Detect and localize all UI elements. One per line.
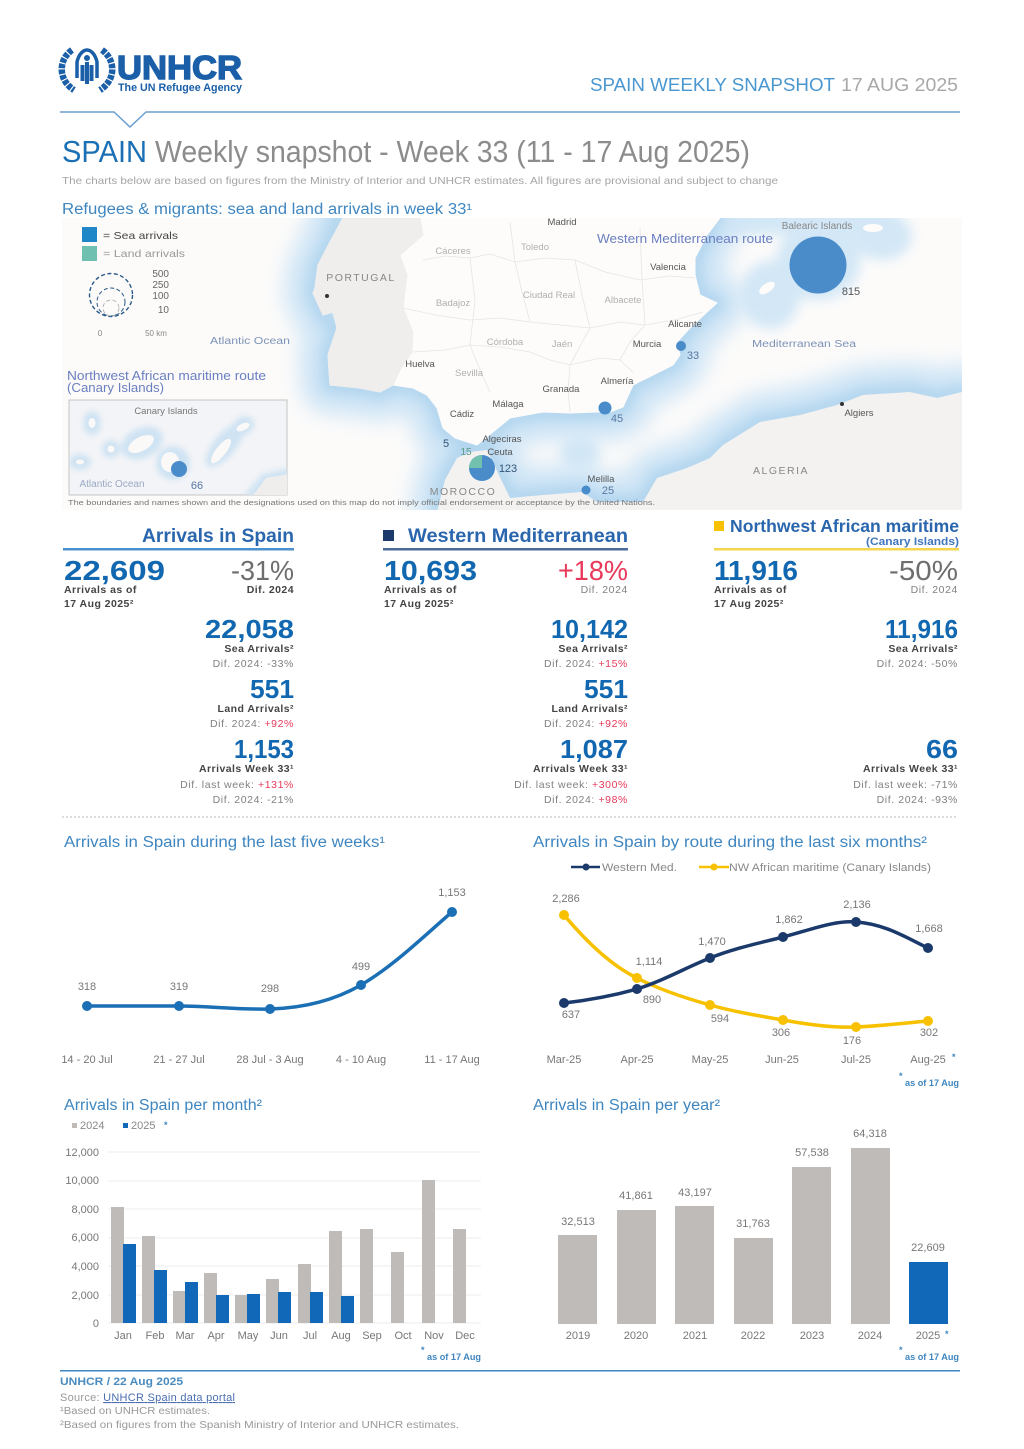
map labels: Cáceres [435, 246, 471, 257]
total arrivals: Arrivals as of [714, 584, 787, 596]
chart: arrivals per month [64, 1097, 481, 1362]
map heading: Refugees & migrants: sea and land arrivals in week 33¹ [62, 201, 472, 218]
map symbols: arrivals circles [325, 236, 860, 497]
x axis labels [61, 1054, 480, 1066]
x axis labels: 2025 [916, 1330, 940, 1342]
y axis and gridlines: 0 [93, 1318, 99, 1330]
land arrivals: 551 [250, 676, 294, 704]
week arrivals: Dif. 2024: -93% [877, 794, 958, 806]
map legend: 250 [152, 280, 169, 291]
header label [590, 74, 958, 95]
week arrivals [180, 736, 294, 806]
sea arrivals: Sea Arrivals² [888, 643, 958, 655]
header label: SPAIN WEEKLY SNAPSHOT [590, 74, 835, 95]
note: as of 17 Aug [427, 1352, 481, 1362]
sea arrivals: Dif. 2024: +15% [544, 658, 628, 670]
x axis labels: Sep [362, 1330, 382, 1342]
map labels: Almería [601, 376, 634, 387]
land arrivals: Dif. 2024: +92% [210, 718, 294, 730]
value labels: 302 [920, 1027, 938, 1039]
x axis labels: * [945, 1329, 949, 1339]
chart title: Arrivals in Spain during the last five weeks¹ [64, 834, 385, 851]
inset map: Canary Islands [69, 400, 290, 497]
series: NW African maritime [559, 910, 933, 1032]
week arrivals: 66 [926, 736, 958, 764]
map labels: Madrid [547, 217, 577, 228]
value labels: 319 [170, 981, 188, 993]
x axis labels: 11 - 17 Aug [424, 1054, 480, 1066]
x axis labels: 2021 [683, 1330, 707, 1342]
x axis labels: May [238, 1330, 259, 1342]
x axis labels: Dec [455, 1330, 475, 1342]
x axis labels: Jan [114, 1330, 132, 1342]
total arrivals [64, 555, 165, 610]
x axis labels: 4 - 10 Aug [336, 1054, 386, 1066]
panel: Northwest African maritime [714, 516, 959, 806]
week arrivals: Dif. 2024: +98% [544, 794, 628, 806]
x axis labels: Oct [394, 1330, 412, 1342]
x axis labels: 28 Jul - 3 Aug [236, 1054, 304, 1066]
map symbols: arrivals circles: 15 [460, 447, 472, 458]
difference 2024: Dif. 2024 [911, 584, 958, 596]
y axis and gridlines: 8,000 [71, 1204, 99, 1216]
legend [72, 1120, 168, 1132]
map symbols: arrivals circles: 123 [499, 463, 517, 475]
note: * [899, 1071, 903, 1081]
map symbols: arrivals circles: 25 [602, 485, 614, 497]
map symbols: arrivals circles: 5 [443, 438, 449, 450]
total arrivals: 11,916 [714, 555, 798, 586]
land: Spain [313, 218, 720, 445]
difference 2024: -31% [231, 555, 294, 586]
total arrivals [714, 555, 798, 610]
Canary route heading [67, 369, 266, 395]
bars 2025 [123, 1244, 354, 1323]
map labels: Atlantic Ocean [210, 336, 290, 347]
map labels: Cádiz [450, 409, 474, 420]
map labels: Mediterranean Sea [752, 339, 857, 350]
value labels: 637 [562, 1009, 580, 1021]
y axis and gridlines: 4,000 [71, 1261, 99, 1273]
total arrivals: Arrivals as of [384, 584, 457, 596]
header rule with chevron [60, 112, 960, 127]
value labels: 31,763 [736, 1218, 770, 1230]
map labels: Murcia [633, 339, 662, 350]
footer: Source: UNHCR Spain data portal [60, 1392, 235, 1404]
inset map: Canary Islands: Atlantic Ocean [79, 479, 145, 490]
map labels: Balearic Islands [782, 221, 852, 232]
x axis labels [114, 1330, 475, 1342]
inset map: Canary Islands: 66 [191, 480, 203, 492]
x axis labels: Jun-25 [765, 1054, 799, 1066]
line series [82, 907, 457, 1014]
x axis labels: 2022 [741, 1330, 765, 1342]
map labels: Algiers [844, 408, 874, 419]
week arrivals [514, 736, 628, 806]
week arrivals: Arrivals Week 33¹ [199, 763, 294, 775]
value labels: 1,862 [775, 914, 803, 926]
legend: * [164, 1120, 168, 1130]
chart: arrivals per year [533, 1097, 959, 1362]
footer: UNHCR / 22 Aug 2025 [60, 1376, 183, 1388]
chart: arrivals last five weeks [61, 834, 480, 1066]
chart: arrivals by route [533, 834, 959, 1088]
total arrivals: 17 Aug 2025² [64, 598, 134, 610]
y axis and gridlines [65, 1147, 481, 1330]
difference 2024: Dif. 2024 [581, 584, 628, 596]
map legend: 500 [152, 269, 169, 280]
map legend: = Land arrivals [103, 248, 185, 260]
legend: 2024 [80, 1120, 104, 1132]
note: as of 17 Aug [905, 1078, 959, 1088]
week arrivals: Arrivals Week 33¹ [533, 763, 628, 775]
map labels: Granada [543, 384, 580, 395]
value labels: 318 [78, 981, 96, 993]
sea arrivals: 11,916 [885, 616, 958, 644]
icon: UNHCR wreath and figures [62, 50, 112, 90]
x axis labels: Feb [146, 1330, 164, 1342]
x axis labels: Nov [424, 1330, 444, 1342]
x axis labels: 14 - 20 Jul [61, 1054, 113, 1066]
footer [60, 1376, 459, 1431]
heading: Arrivals in Spain [142, 526, 294, 547]
title: SPAIN [62, 134, 147, 169]
value labels: 890 [643, 994, 661, 1006]
map labels: Córdoba [487, 337, 524, 348]
x axis labels: May-25 [692, 1054, 728, 1066]
sea arrivals: Sea Arrivals² [224, 643, 294, 655]
week arrivals: Dif. last week: +131% [180, 779, 294, 791]
map labels: Jaén [552, 339, 572, 350]
y axis and gridlines: 10,000 [65, 1175, 99, 1187]
note: as of 17 Aug [905, 1352, 959, 1362]
value labels [78, 887, 466, 995]
legend: Western Med. [602, 862, 677, 874]
chart title: Arrivals in Spain per year² [533, 1097, 720, 1114]
land arrivals: Land Arrivals² [217, 703, 294, 715]
map labels: Alicante [668, 319, 702, 330]
x axis labels: Mar [176, 1330, 195, 1342]
week arrivals: 1,153 [234, 736, 294, 764]
panel: Western Mediterranean [383, 526, 628, 806]
sea arrivals [877, 616, 958, 670]
map labels [210, 217, 874, 498]
note [899, 1345, 959, 1362]
map labels: ALGERIA [753, 465, 809, 477]
value labels: 64,318 [853, 1128, 887, 1140]
map legend: = Sea arrivals [103, 230, 178, 242]
week arrivals: Dif. 2024: -21% [213, 794, 294, 806]
map labels: Algeciras [482, 434, 522, 445]
heading: (Canary Islands) [866, 536, 959, 548]
land arrivals: Land Arrivals² [551, 703, 628, 715]
value labels [552, 893, 943, 1047]
map symbols: arrivals circles: 33 [687, 350, 699, 362]
difference 2024: +18% [558, 555, 628, 586]
sea arrivals: Dif. 2024: -50% [877, 658, 958, 670]
logo wordmark: UNHCR [117, 49, 242, 86]
land arrivals: Dif. 2024: +92% [544, 718, 628, 730]
x axis labels: 2019 [566, 1330, 590, 1342]
map disclaimer: The boundaries and names shown and the designations used on this map do not imply official endorsement or acceptance by the United Nations. [68, 500, 655, 507]
week arrivals: Dif. last week: -71% [853, 779, 958, 791]
map labels: Melilla [588, 474, 615, 485]
map labels: PORTUGAL [326, 272, 396, 284]
map legend: 10 [158, 305, 169, 316]
map labels: Ceuta [487, 447, 513, 458]
map labels: Málaga [492, 399, 524, 410]
sea arrivals [544, 616, 628, 670]
x axis labels: Aug-25 [910, 1054, 946, 1066]
x axis labels: Jul [303, 1330, 317, 1342]
legend: NW African maritime (Canary Islands) [729, 862, 931, 874]
x axis labels: Apr-25 [620, 1054, 654, 1066]
legend [571, 862, 931, 874]
map legend: 0 [98, 329, 103, 338]
value labels: 22,609 [911, 1242, 945, 1254]
value labels: 1,668 [915, 923, 943, 935]
Canary route heading: Northwest African maritime route [67, 369, 266, 383]
logo tagline: The UN Refugee Agency [118, 82, 243, 94]
title: Weekly snapshot - Week 33 (11 - 17 Aug 2025) [155, 134, 750, 169]
value labels: 57,538 [795, 1147, 829, 1159]
difference 2024: Dif. 2024 [247, 584, 294, 596]
panel: Arrivals in Spain [63, 526, 294, 806]
value labels: 1,470 [698, 936, 726, 948]
legend: 2025 [131, 1120, 155, 1132]
x axis labels [566, 1329, 949, 1342]
land: Portugal [313, 218, 423, 392]
difference 2024: -50% [889, 555, 958, 586]
value labels [561, 1128, 945, 1254]
map labels: Sevilla [455, 368, 484, 379]
total arrivals: 10,693 [384, 555, 477, 586]
note: * [899, 1345, 903, 1355]
heading: Western Mediterranean [408, 526, 628, 547]
x axis labels: * [952, 1052, 956, 1062]
week arrivals: Arrivals Week 33¹ [863, 763, 958, 775]
map labels: Western Mediterranean route [597, 232, 773, 246]
series: Western Med [559, 917, 933, 1008]
map labels: MOROCCO [430, 486, 496, 498]
value labels: 2,286 [552, 893, 580, 905]
map symbols: arrivals circles: 815 [842, 286, 860, 298]
note: * [421, 1345, 425, 1355]
sea arrivals: 22,058 [205, 616, 294, 644]
chart title: Arrivals in Spain per month² [64, 1097, 262, 1114]
heading [714, 516, 959, 548]
sea arrivals: 10,142 [551, 616, 628, 644]
note [899, 1071, 959, 1088]
x axis labels: Apr [207, 1330, 225, 1342]
panel: map [62, 205, 975, 520]
sea arrivals: Dif. 2024: -33% [213, 658, 294, 670]
x axis labels [547, 1052, 956, 1066]
x axis labels: 2023 [800, 1330, 824, 1342]
map labels: Toledo [521, 242, 549, 253]
week arrivals: 1,087 [560, 736, 628, 764]
map labels: Albacete [605, 295, 641, 306]
footer rule [60, 1370, 960, 1372]
value labels: 41,861 [619, 1190, 653, 1202]
map legend: 50 km [145, 329, 167, 338]
map symbols: arrivals circles: 45 [611, 413, 623, 425]
bars 2024 [111, 1180, 466, 1323]
map legend [82, 227, 185, 338]
total arrivals: Arrivals as of [64, 584, 137, 596]
week arrivals: Dif. last week: +300% [514, 779, 628, 791]
value labels: 306 [772, 1027, 790, 1039]
note [421, 1345, 481, 1362]
x axis labels: Mar-25 [547, 1054, 581, 1066]
inset map: Canary Islands: Canary Islands [134, 406, 198, 417]
week arrivals [853, 736, 958, 806]
x axis labels: 2024 [858, 1330, 882, 1342]
coastal halo [313, 205, 975, 520]
sea arrivals: Sea Arrivals² [558, 643, 628, 655]
footer: ²Based on figures from the Spanish Ministry of Interior and UNHCR estimates. [60, 1419, 459, 1431]
map labels: Huelva [405, 359, 435, 370]
value labels: 1,114 [636, 956, 662, 968]
x axis labels: Jun [270, 1330, 288, 1342]
value labels: 2,136 [843, 899, 871, 911]
land arrivals [210, 676, 294, 730]
heading: Northwest African maritime [730, 516, 959, 536]
total arrivals: 22,609 [64, 555, 165, 586]
value labels: 499 [352, 961, 370, 973]
value labels: 32,513 [561, 1216, 595, 1228]
map labels: Valencia [650, 262, 687, 273]
y axis and gridlines: 2,000 [71, 1290, 99, 1302]
chart title: Arrivals in Spain by route during the last six months² [533, 834, 927, 851]
footer: ¹Based on UNHCR estimates. [60, 1405, 210, 1417]
province borders [403, 222, 703, 412]
y axis and gridlines: 6,000 [71, 1232, 99, 1244]
land arrivals [544, 676, 628, 730]
map labels: Ciudad Real [523, 290, 575, 301]
x axis labels: 21 - 27 Jul [153, 1054, 205, 1066]
map legend: 100 [152, 291, 169, 302]
total arrivals: 17 Aug 2025² [384, 598, 454, 610]
x axis labels: 2020 [624, 1330, 648, 1342]
total arrivals: 17 Aug 2025² [714, 598, 784, 610]
land: North Africa [437, 392, 962, 512]
subtitle: The charts below are based on figures from the Ministry of Interior and UNHCR estimates. All figures are provisional and subject to change [62, 175, 778, 187]
value labels: 176 [843, 1035, 861, 1047]
value labels: 298 [261, 983, 279, 995]
logo: UNHCR [62, 49, 243, 94]
y axis and gridlines: 12,000 [65, 1147, 99, 1159]
value labels: 43,197 [678, 1187, 712, 1199]
land: Balearic Islands [757, 224, 883, 297]
x axis labels: Jul-25 [841, 1054, 871, 1066]
sea arrivals [205, 616, 294, 670]
value labels: 594 [711, 1013, 729, 1025]
land arrivals: 551 [584, 676, 628, 704]
header label: 17 AUG 2025 [841, 74, 958, 95]
x axis labels: Aug [331, 1330, 351, 1342]
bars [558, 1148, 948, 1324]
map labels: Badajoz [436, 298, 470, 309]
Canary route heading: (Canary Islands) [67, 381, 164, 395]
value labels: 1,153 [438, 887, 466, 899]
total arrivals [384, 555, 477, 610]
